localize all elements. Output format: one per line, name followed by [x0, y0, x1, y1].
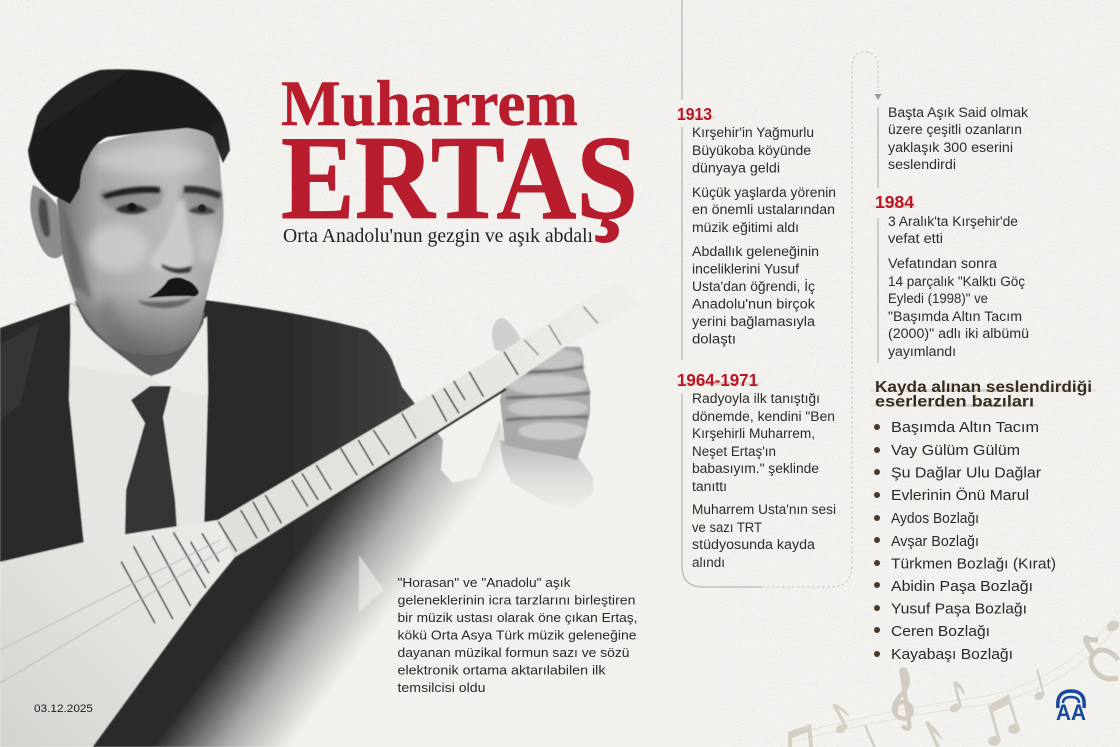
timeline 1984: Eyledi (1998)" ve — [888, 291, 988, 306]
timeline 1964-1971: Neşet Ertaş'ın — [692, 444, 776, 459]
bottom-right fade over jacket — [60, 300, 720, 747]
face — [57, 128, 224, 355]
notch beside intro text — [359, 555, 384, 612]
timeline 1984: "Başımda Altın Tacım — [888, 309, 1022, 324]
timeline lines — [682, 0, 882, 587]
fingers — [506, 349, 590, 440]
icon: note top — [1033, 669, 1045, 702]
timeline 1964-1971: babasıyım." şeklinde — [692, 461, 819, 476]
timeline continued text: yaklaşık 300 eserini — [888, 140, 1013, 155]
icon: note — [948, 681, 964, 714]
timeline 1913: inceliklerini Yusuf — [692, 262, 799, 276]
timeline 1984: (2000)" adlı iki albümü — [888, 326, 1029, 341]
timeline 1913: Kırşehir'in Yağmurlu — [692, 125, 814, 140]
date: 03.12.2025 — [34, 703, 93, 715]
timeline 1964-1971: Radyoyla ilk tanıştığı — [692, 391, 820, 406]
saz body and neck — [0, 280, 640, 747]
timeline 1984: 14 parçalık "Kalktı Göç — [888, 274, 1025, 289]
timeline 1964-1971: ve sazı TRT — [692, 520, 762, 535]
saz dark edge — [94, 389, 506, 747]
list of works: Türkmen Bozlağı (Kırat) — [891, 556, 1056, 572]
icon: note small — [832, 704, 849, 735]
timeline 1913: dolaştı — [692, 332, 736, 346]
icon: beamed note cut — [788, 724, 876, 747]
timeline 1913: dünyaya geldi — [692, 160, 780, 176]
timeline continued text: üzere çeşitli ozanların — [888, 122, 1022, 137]
title: Muharrem: Muharrem — [281, 68, 578, 140]
timeline 1913: Büyükoba köyünde — [692, 143, 811, 158]
timeline continued text — [888, 105, 1028, 172]
timeline 1984: Vefatından sonra — [888, 256, 998, 271]
ear — [30, 185, 64, 258]
logo: AA: AA — [1056, 700, 1086, 725]
list of works: Avşar Bozlağı — [891, 534, 979, 550]
timeline 1913: Abdallık geleneğinin — [692, 244, 819, 259]
subtitle: Orta Anadolu'nun gezgin ve aşık abdalı — [283, 225, 593, 247]
timeline 1964-1971: Kırşehirli Muharrem, — [692, 426, 815, 441]
timeline 1913: Usta'dan öğrendi, İç — [692, 279, 815, 294]
timeline 1964-1971: stüdyosunda kayda — [692, 537, 816, 552]
shirt — [69, 303, 208, 545]
paragraph: intro: temsilcisi oldu — [398, 681, 486, 695]
timeline continued text: Başta Aşık Said olmak — [888, 105, 1028, 120]
face shadows and highlights — [62, 145, 222, 350]
mouth — [137, 298, 193, 308]
icon: sixteenth note — [925, 721, 943, 747]
list of works: Vay Gülüm Gülüm — [891, 443, 1020, 459]
paragraph: intro: bir müzik ustası olarak öne çıkan Ertaş, — [398, 611, 638, 625]
photo of Muharrem Ertaş with saz — [0, 69, 720, 747]
paragraph: intro — [398, 576, 638, 695]
hand and cuff — [492, 318, 593, 508]
heading: recorded works — [870, 379, 1096, 410]
nose — [150, 200, 193, 270]
list of works: Ceren Bozlağı — [891, 624, 990, 640]
list of works: Evlerinin Önü Marul — [891, 486, 1029, 504]
timeline 1964-1971 — [676, 370, 836, 570]
timeline 1964-1971: dönemde, kendini "Ben — [692, 409, 835, 424]
year 1984: 1984 — [875, 192, 914, 212]
paragraph: intro: kökü Orta Asya Türk müzik geleneğine — [398, 628, 636, 642]
title: ERTAŞ: ERTAŞ — [281, 111, 638, 244]
tie — [125, 386, 177, 536]
icon: treble clef left — [894, 670, 912, 729]
icon: beamed note — [988, 694, 1020, 746]
icon: note far right — [1105, 618, 1120, 634]
list of works: Başımda Altın Tacım — [891, 420, 1039, 436]
left collar — [70, 304, 151, 378]
list of works: Şu Dağlar Ulu Dağlar — [891, 466, 1041, 482]
lapel shading — [0, 322, 40, 420]
timeline 1913: yerini bağlamasıyla — [692, 314, 816, 329]
timeline 1964-1971: alındı — [692, 555, 725, 570]
jacket — [0, 300, 590, 747]
year 1964-1971: 1964-1971 — [677, 370, 758, 390]
timeline 1913: en önemli ustalarından — [692, 202, 835, 217]
saz frets — [0, 307, 598, 683]
right collar — [150, 316, 208, 396]
paragraph: intro: geleneklerinin icra tarzlarını birleştiren — [398, 594, 636, 608]
timeline 1964-1971: Muharrem Usta'nın sesi — [692, 502, 836, 517]
hair — [28, 69, 230, 204]
list of works: Abidin Paşa Bozlağı — [891, 579, 1033, 595]
moustache — [148, 278, 199, 298]
timeline 1984: vefat etti — [888, 231, 943, 246]
neck — [74, 300, 205, 376]
timeline 1913: müzik eğitimi aldı — [692, 220, 799, 235]
icon: treble clef right — [1086, 638, 1118, 679]
paragraph: intro: "Horasan" ve "Anadolu" aşık — [398, 576, 571, 590]
heading: recorded works: eserlerden bazıları — [875, 394, 1034, 410]
timeline 1913: Anadolu'nun birçok — [692, 296, 815, 312]
list of works: Kayabaşı Bozlağı — [891, 647, 1013, 663]
list of works — [874, 420, 1056, 663]
timeline 1984: 3 Aralık'ta Kırşehir'de — [888, 214, 1018, 229]
timeline 1913: Küçük yaşlarda yörenin — [692, 185, 836, 200]
eyes — [115, 204, 148, 214]
list of works: Yusuf Paşa Bozlağı — [891, 602, 1027, 618]
timeline 1913 — [676, 104, 836, 346]
paragraph: intro: elektronik ortama aktarılabilen ilk — [398, 664, 606, 678]
year 1913: 1913 — [677, 104, 712, 124]
paragraph: intro: dayanan müzikal formun sazı ve sözü — [398, 646, 630, 660]
timeline 1964-1971: tanıttı — [692, 479, 727, 494]
eyebrows — [102, 186, 160, 199]
timeline 1984: yayımlandı — [888, 344, 956, 359]
list of works: Aydos Bozlağı — [891, 511, 979, 527]
timeline 1984 — [873, 192, 1029, 359]
heading: recorded works: Kayda alınan seslendirdiği — [875, 379, 1092, 396]
music notes decoration — [788, 610, 1120, 747]
timeline continued text: seslendirdi — [888, 157, 956, 172]
